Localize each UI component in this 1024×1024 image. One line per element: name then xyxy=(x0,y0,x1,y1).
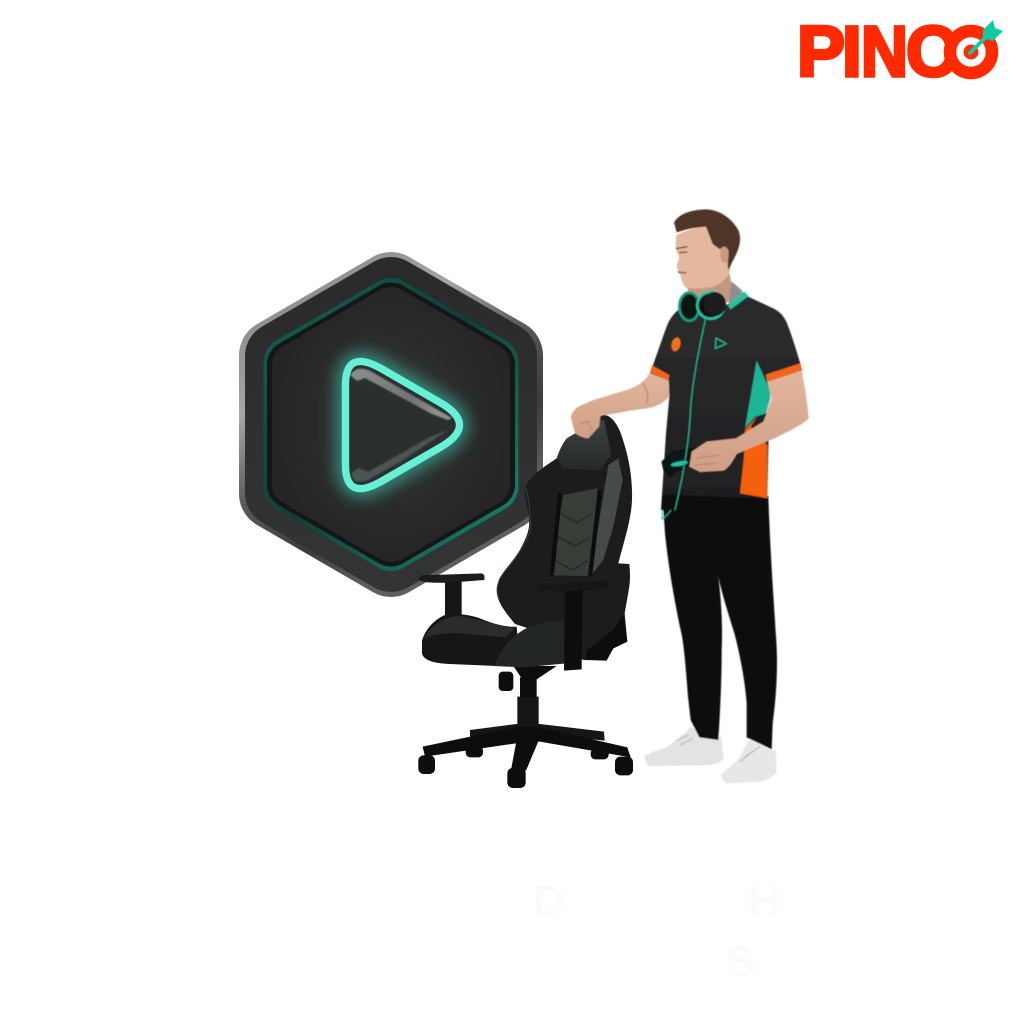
hexagon inner face xyxy=(294,309,488,540)
play icon xyxy=(346,361,460,489)
hexagon body xyxy=(279,291,503,558)
gaming chair xyxy=(418,415,633,788)
cable loop xyxy=(662,491,678,519)
teal triangle crest xyxy=(715,338,726,348)
shirt hem and trouser waist xyxy=(661,495,767,510)
triangle bevel bottom xyxy=(351,430,448,482)
left shoe xyxy=(645,726,724,766)
upper body xyxy=(571,209,809,510)
orange crest xyxy=(670,336,682,352)
teal collar xyxy=(728,291,749,309)
eye and mouth details xyxy=(676,247,687,273)
left arm xyxy=(571,373,669,439)
seat side panel xyxy=(494,621,567,667)
side panel teal xyxy=(745,361,771,428)
neon outline xyxy=(346,361,460,489)
grey inner collar xyxy=(728,282,743,307)
faint ghost text: S xyxy=(726,937,755,986)
logo wordmark: N xyxy=(861,13,908,92)
chair headrest panel xyxy=(557,419,611,470)
logo target icon xyxy=(944,20,1003,78)
dark groove xyxy=(291,306,491,542)
left cuff xyxy=(650,365,669,381)
logo wordmark: P xyxy=(797,13,845,92)
chair seat xyxy=(422,614,520,666)
faint ghost text: D xyxy=(533,877,565,926)
fingers and muscle shading xyxy=(580,383,720,465)
right arm and hand xyxy=(689,371,809,472)
headphones xyxy=(679,292,726,321)
trousers and shoes xyxy=(645,491,777,783)
faint ghost text: H xyxy=(748,877,780,926)
hair xyxy=(674,209,740,270)
controller accent xyxy=(670,460,688,467)
neck xyxy=(687,268,735,310)
chair side stripe xyxy=(590,458,623,577)
chair edge trim xyxy=(497,487,530,600)
shoe laces xyxy=(677,735,760,762)
chair centre panel xyxy=(553,488,600,576)
shirt xyxy=(650,296,802,498)
faint ghost text xyxy=(533,877,780,986)
logo: PINCO xyxy=(797,13,1003,92)
hexagon outer rim xyxy=(275,288,507,561)
chair stitch chevrons xyxy=(555,513,593,570)
shirt cable xyxy=(675,318,706,510)
logo wordmark: C xyxy=(906,13,957,92)
hexagon play badge xyxy=(275,288,507,561)
ear xyxy=(720,245,731,263)
teal ring glow xyxy=(290,304,492,545)
side panel orange xyxy=(740,416,767,498)
trousers xyxy=(662,493,777,749)
right shoe xyxy=(721,737,777,783)
chair lumbar cushion xyxy=(527,576,603,640)
face xyxy=(676,226,731,289)
neon halo xyxy=(346,361,460,489)
chair backrest xyxy=(497,415,632,661)
right armrest xyxy=(538,581,607,671)
player figure xyxy=(571,209,809,783)
side panel grey xyxy=(766,395,780,413)
chair casters xyxy=(418,746,633,788)
right cuff xyxy=(766,363,802,382)
chair base xyxy=(418,666,633,788)
left armrest xyxy=(418,573,485,615)
logo wordmark: I xyxy=(842,13,862,92)
seat highlight xyxy=(424,616,515,638)
triangle fill xyxy=(346,361,460,489)
triangle bevel top xyxy=(350,369,452,420)
logo wordmark xyxy=(797,13,957,92)
rear bracket xyxy=(585,613,627,661)
controller xyxy=(661,446,708,478)
chair side dark stripes xyxy=(552,490,600,577)
